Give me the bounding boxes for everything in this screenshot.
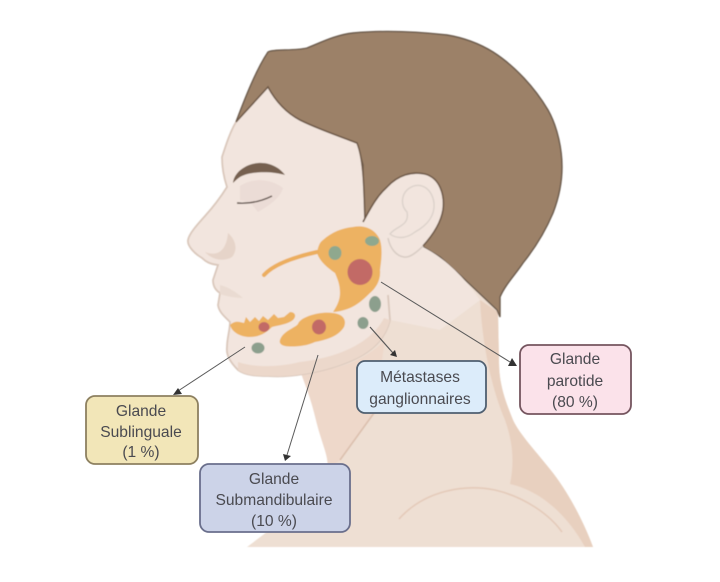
neck (247, 247, 593, 547)
box: Glande Submandibulaire: Submandibulaire (215, 492, 333, 509)
parotid tumour (348, 259, 372, 285)
box: Glande parotide: (80 %) (552, 394, 598, 411)
parotid nodes (328, 246, 342, 260)
hair (236, 32, 562, 317)
closed eye (237, 196, 272, 203)
submandibular tumour (312, 320, 326, 334)
jaw shadow (238, 318, 390, 376)
parotid gland (264, 226, 382, 312)
arrow: to Métastases ganglionnaires (370, 327, 397, 357)
nose shading (205, 233, 235, 260)
arrow: to Glande parotide (381, 282, 517, 366)
box: Glande parotide (520, 345, 631, 414)
Stensen duct (264, 252, 317, 275)
illustration: head and neck in profile (188, 32, 593, 547)
sublingual gland (230, 312, 295, 337)
eyebrow (233, 163, 285, 183)
arrow: to Glande Sublinguale (173, 347, 245, 395)
box: Glande Submandibulaire (200, 464, 350, 532)
eyelid (240, 180, 283, 212)
ear (363, 173, 443, 257)
box: Métastases ganglionnaires: Métastases (380, 369, 460, 386)
box: Glande Sublinguale: (1 %) (122, 444, 160, 461)
lymph nodes (252, 296, 381, 354)
box: Glande Submandibulaire: Glande (249, 471, 299, 488)
neck shadow: front (300, 340, 385, 470)
lips (220, 285, 243, 298)
sublingual tumour (258, 322, 270, 332)
hairline outline (236, 87, 365, 222)
box: Glande parotide: Glande (550, 351, 600, 368)
face (188, 87, 480, 376)
neck shadow: back (480, 300, 593, 547)
box: Glande Sublinguale: Sublinguale (100, 424, 182, 441)
parotid body (317, 226, 382, 312)
neck line (340, 413, 374, 460)
box: Métastases ganglionnaires: ganglionnaires (369, 391, 471, 408)
arrow: to Glande Submandibulaire (283, 355, 318, 461)
box: Métastases ganglionnaires (357, 361, 486, 413)
box: Glande Sublinguale: Glande (116, 403, 166, 420)
box: Glande parotide: parotide (547, 373, 603, 390)
collarbone line (399, 488, 562, 532)
box: Glande Submandibulaire: (10 %) (251, 513, 297, 530)
face outline (188, 122, 390, 376)
submandibular gland (280, 313, 345, 347)
box: Glande Sublinguale (86, 396, 198, 464)
